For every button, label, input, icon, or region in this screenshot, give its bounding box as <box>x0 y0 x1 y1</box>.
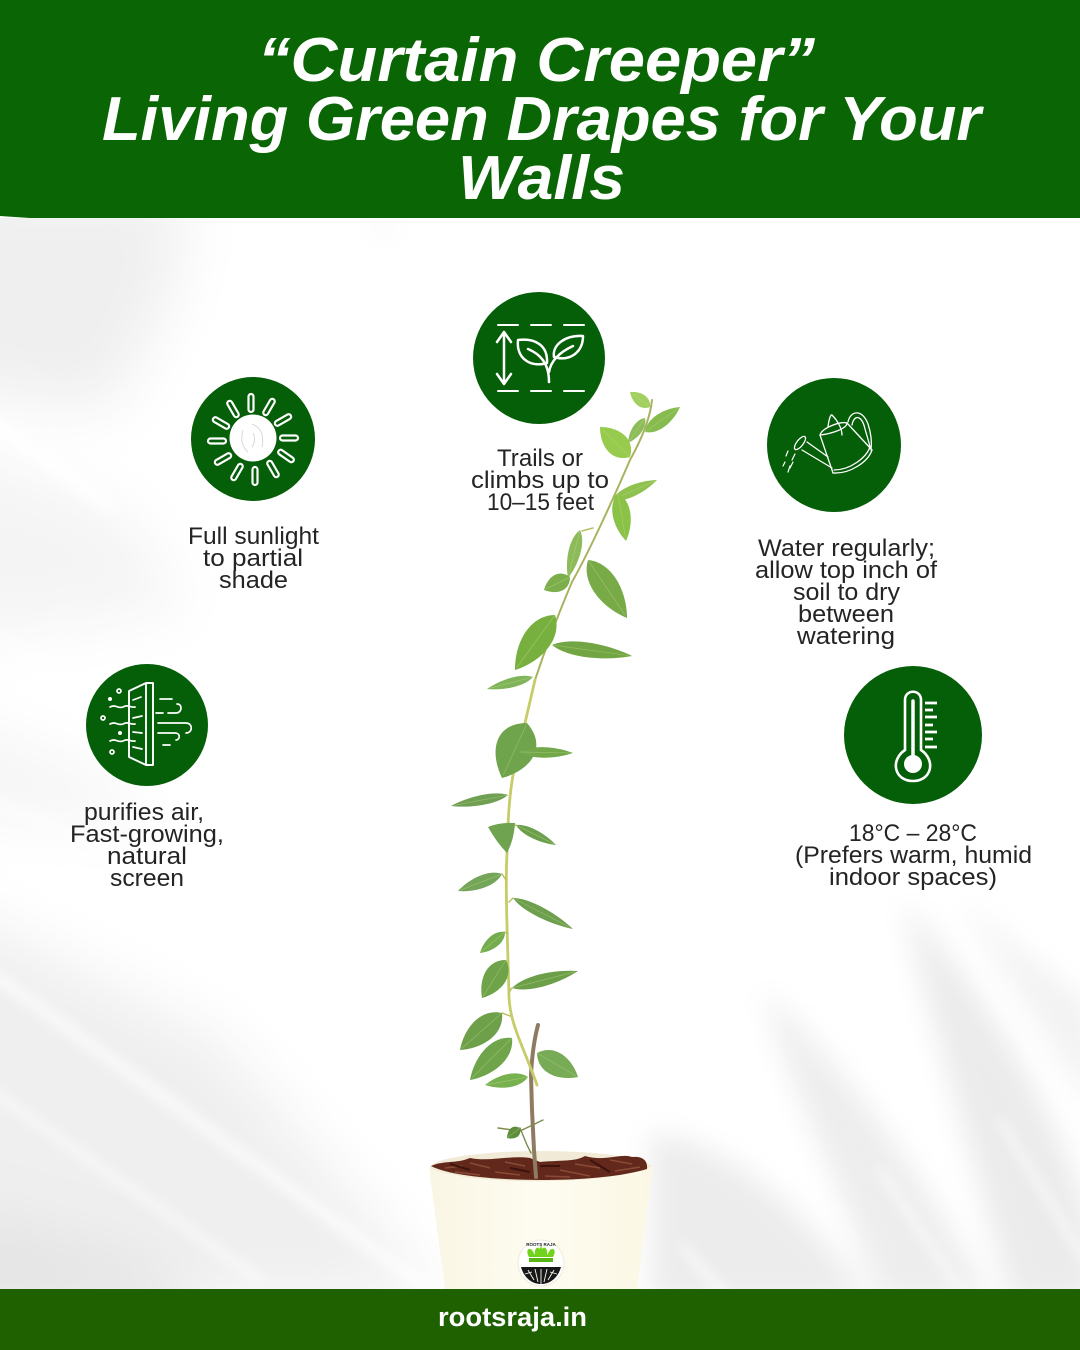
icon: thermometer <box>844 666 982 804</box>
label: watering <box>755 535 937 650</box>
title <box>102 26 984 213</box>
label: air: screen <box>110 865 184 892</box>
label: watering: between <box>798 601 894 628</box>
label: watering: soil to dry <box>793 579 900 606</box>
stem <box>498 400 652 1177</box>
label: trails <box>471 445 609 516</box>
icon: plant height <box>473 292 605 424</box>
feature: full sunlight <box>188 377 319 594</box>
label: sunlight: to partial <box>203 545 303 572</box>
leaves <box>450 387 684 1142</box>
label: watering: Water regularly; <box>758 535 935 562</box>
icon: sun <box>191 377 315 501</box>
title: “Curtain Creeper” <box>258 26 815 95</box>
label: watering: allow top inch of <box>755 557 937 584</box>
pot logo: ROOTS RAJA <box>526 1242 556 1247</box>
label: trails: climbs up to <box>471 467 609 494</box>
header banner <box>0 0 1080 218</box>
icon: watering can <box>767 378 901 512</box>
soil <box>431 1156 647 1180</box>
feature: trails or climbs <box>471 292 609 516</box>
label: temperature: indoor spaces) <box>829 864 997 891</box>
pot logo <box>518 1240 564 1286</box>
feature: temperature <box>795 666 1032 891</box>
label: trails: 10–15 feet <box>487 489 594 516</box>
label: watering: watering <box>796 623 895 650</box>
title: Living Green Drapes for Your <box>102 85 984 154</box>
label: sunlight <box>188 523 319 594</box>
feature: watering <box>755 378 937 650</box>
label: air <box>70 799 224 892</box>
pot <box>429 1151 653 1289</box>
title: Walls <box>458 144 625 213</box>
label: temperature: 18°C – 28°C <box>849 820 977 847</box>
label: air: natural <box>107 843 187 870</box>
footer bar <box>0 1289 1080 1350</box>
icon: air filter <box>86 664 208 786</box>
label: sunlight: shade <box>219 567 288 594</box>
label: sunlight: Full sunlight <box>188 523 319 550</box>
label: air: purifies air, <box>84 799 204 826</box>
label: temperature <box>795 820 1032 891</box>
footer website: rootsraja.in <box>438 1302 587 1332</box>
feature: air purifying <box>70 664 224 892</box>
label: temperature: (Prefers warm, humid <box>795 842 1032 869</box>
label: air: Fast-growing, <box>70 821 224 848</box>
plant in pot <box>429 387 684 1289</box>
label: trails: Trails or <box>497 445 583 472</box>
